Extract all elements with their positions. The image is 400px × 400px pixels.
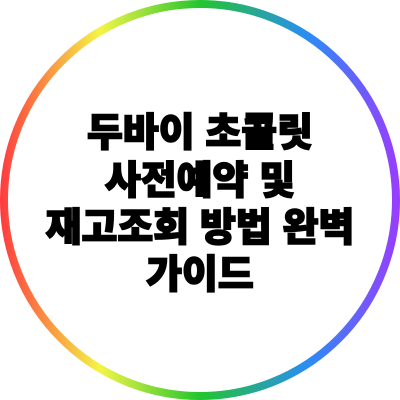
title: 두바이 초콜릿 [87,112,313,155]
title: 사전예약 및 [105,160,295,203]
title: 가이드 [146,254,254,297]
title [45,112,354,297]
title: 재고조회 방법 완벽 [46,207,354,250]
